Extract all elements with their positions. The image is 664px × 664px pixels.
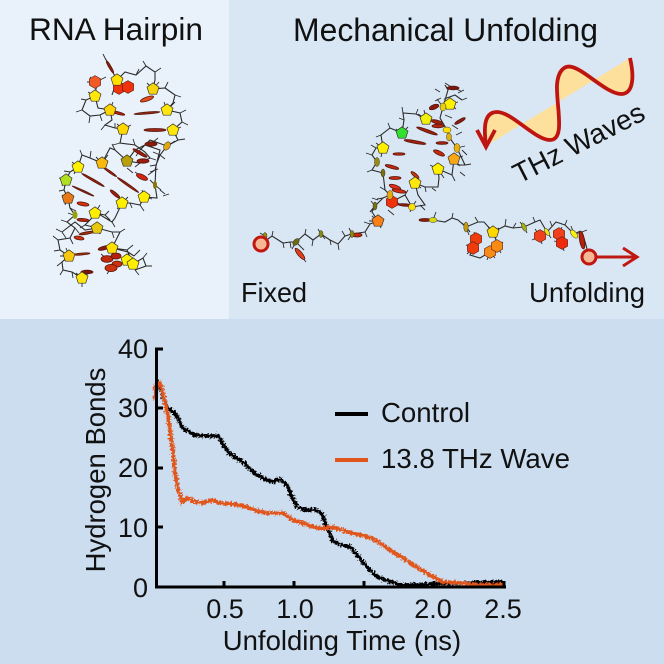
legend xyxy=(335,397,570,474)
molecule: partly unfolded RNA xyxy=(260,83,589,262)
series: control xyxy=(156,380,503,585)
line chart: hydrogen bonds vs unfolding time xyxy=(80,334,570,656)
y tick labels: 30 xyxy=(118,393,148,423)
heading: RNA Hairpin: RNA Hairpin xyxy=(29,11,203,47)
x tick labels: 0.5 xyxy=(206,594,244,624)
icon: THz wave with arrow xyxy=(477,58,632,147)
y tick labels: 10 xyxy=(118,513,148,543)
axes xyxy=(156,349,506,587)
heading: Mechanical Unfolding: Mechanical Unfolding xyxy=(293,12,598,48)
panel: mechanical unfolding background xyxy=(229,0,664,319)
series: 13.8 THz wave xyxy=(155,383,503,585)
y tick labels: 40 xyxy=(118,334,148,364)
x tick labels: 2.0 xyxy=(414,594,452,624)
y axis label: Hydrogen Bonds xyxy=(80,368,111,572)
y tick labels xyxy=(118,334,148,603)
x tick labels: 1.5 xyxy=(346,594,384,624)
legend: control: Control xyxy=(381,397,470,428)
x axis label: Unfolding Time (ns) xyxy=(223,625,461,656)
label: Unfolding: Unfolding xyxy=(529,277,645,308)
molecule: folded RNA hairpin xyxy=(53,54,188,287)
x tick labels: 1.0 xyxy=(276,594,314,624)
y tick labels: 0 xyxy=(133,573,148,603)
y tick labels: 20 xyxy=(118,453,148,483)
label: THz Waves: THz Waves xyxy=(508,97,650,189)
icon: fixed anchor point xyxy=(254,237,268,251)
label: Fixed: Fixed xyxy=(241,277,307,308)
panel: chart background xyxy=(0,319,664,664)
panel: RNA hairpin background xyxy=(0,0,229,319)
arrow: unfolding pull direction xyxy=(582,248,637,266)
x tick labels: 2.5 xyxy=(484,594,522,624)
x tick labels xyxy=(206,594,522,624)
legend: control xyxy=(335,397,470,428)
legend: 13.8 THz wave: 13.8 THz Wave xyxy=(381,443,570,474)
